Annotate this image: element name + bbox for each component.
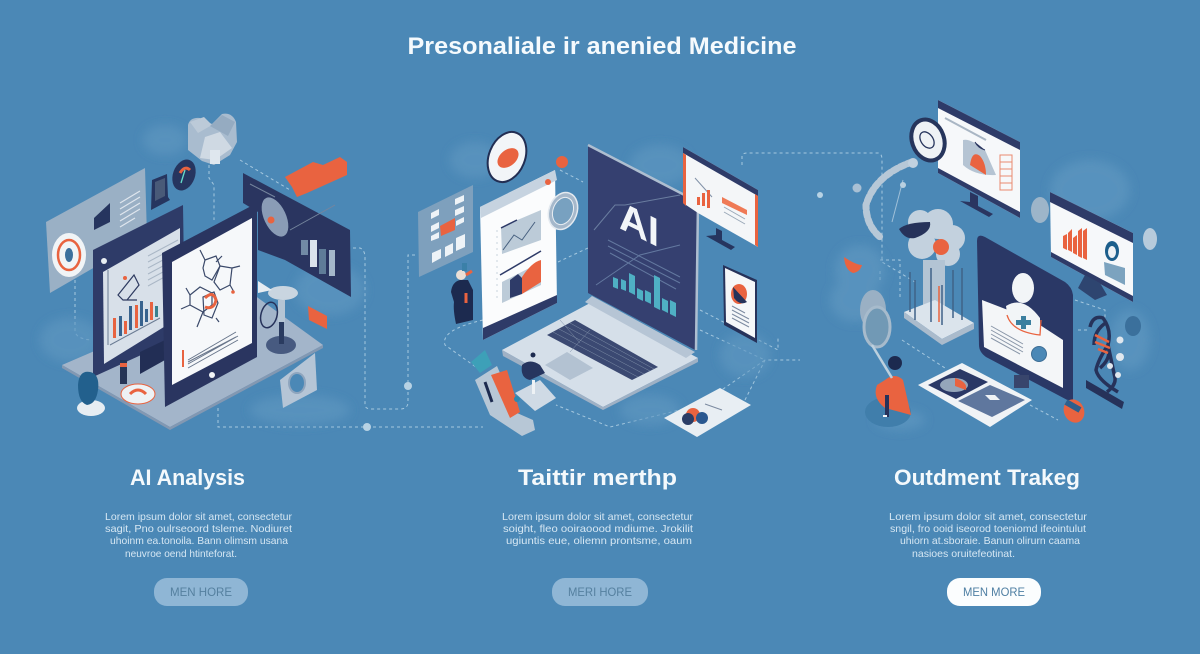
top monitor [938, 100, 1020, 218]
background haze [40, 125, 365, 425]
top right monitor [683, 147, 758, 250]
person with orange coat [860, 290, 911, 427]
small devices and badge [151, 156, 200, 210]
body text: Lorem ipsum dolor sit amet, consectetur [889, 511, 1088, 523]
bottom right card [664, 388, 751, 437]
text lines [188, 332, 238, 368]
DNA helix [1086, 316, 1141, 409]
body text [889, 511, 1088, 560]
body text: nasioes oruitefeotinat. [912, 548, 1015, 560]
laptop screen [585, 145, 698, 358]
body text: uhiorn at.sboraie. Banun olirurn caama [900, 535, 1080, 547]
molecule [181, 250, 240, 327]
body text: Lorem ipsum dolor sit amet, consectetur [502, 511, 694, 523]
connector lines [75, 153, 1105, 431]
microscope lens on pad [514, 352, 556, 411]
body text: soight, fleo ooiraoood mdiume. Jrokilit [503, 523, 693, 535]
body text: ugiuntis eue, oliemn prontsme, oaum [506, 535, 692, 547]
column: AI Analysis text [105, 465, 292, 606]
lamp stand, glasses and folder [258, 281, 327, 354]
front tablet with molecule [162, 203, 257, 407]
laptop base [502, 302, 698, 410]
AI label: AI [619, 192, 659, 256]
scanner gadget [471, 350, 535, 436]
body text: sagit, Pno oulrseoord tsleme. Nodiuret [105, 523, 292, 535]
title: Presonaliale ir anenied Medicine [408, 33, 796, 60]
small floating icons [1031, 197, 1157, 250]
magnifier and orange dot [543, 156, 583, 234]
eye badge [906, 115, 950, 165]
figure [451, 263, 473, 324]
right monitor [1050, 192, 1133, 302]
button: MEN MORE [963, 585, 1025, 599]
body text: uhoinm ea.tonoila. Bann olimsm usana [110, 535, 288, 547]
tablet with charts [480, 170, 557, 340]
orange ribbon [285, 157, 347, 197]
heading: AI Analysis [130, 465, 245, 490]
teal bars [613, 273, 676, 317]
desk [62, 287, 323, 430]
gear ring and dots [852, 158, 918, 237]
heading: Outdment Trakeg [894, 465, 1080, 490]
cube cluster [188, 114, 237, 165]
orange bowl [1060, 396, 1088, 426]
panel: outcome tracking illustration [830, 100, 1157, 430]
button: MEN HORE [170, 585, 232, 599]
button [154, 578, 248, 606]
heading: Taittir merthp [518, 465, 677, 490]
tray with two cards [918, 363, 1032, 427]
body text: neuvroe oend htinteforat. [125, 548, 237, 560]
column: second step text [502, 465, 694, 606]
background haze [830, 160, 1150, 430]
mic, vial and dish [77, 360, 155, 416]
column: outcome text [889, 465, 1088, 606]
cloud tower [899, 209, 974, 345]
body text [105, 511, 292, 560]
dark chart monitor [243, 173, 351, 297]
monitor with charts [93, 205, 185, 377]
left floating panel [418, 185, 473, 277]
phone with pie [723, 265, 757, 343]
button: MERI HORE [568, 585, 632, 599]
body text [502, 511, 694, 547]
panel: AI laptop illustration [418, 126, 770, 437]
back panel [46, 168, 147, 293]
chipped orange shell [844, 257, 862, 273]
panel: AI analysis illustration [40, 114, 365, 430]
button [947, 578, 1041, 606]
background haze [450, 142, 770, 425]
central tablet with patient card [977, 236, 1073, 403]
body text: sngil, fro ooid iseorod toeniomd ifeointulut [890, 523, 1086, 535]
orange badge [481, 126, 533, 188]
button [552, 578, 648, 606]
body text: Lorem ipsum dolor sit amet, consectetur [105, 511, 292, 523]
